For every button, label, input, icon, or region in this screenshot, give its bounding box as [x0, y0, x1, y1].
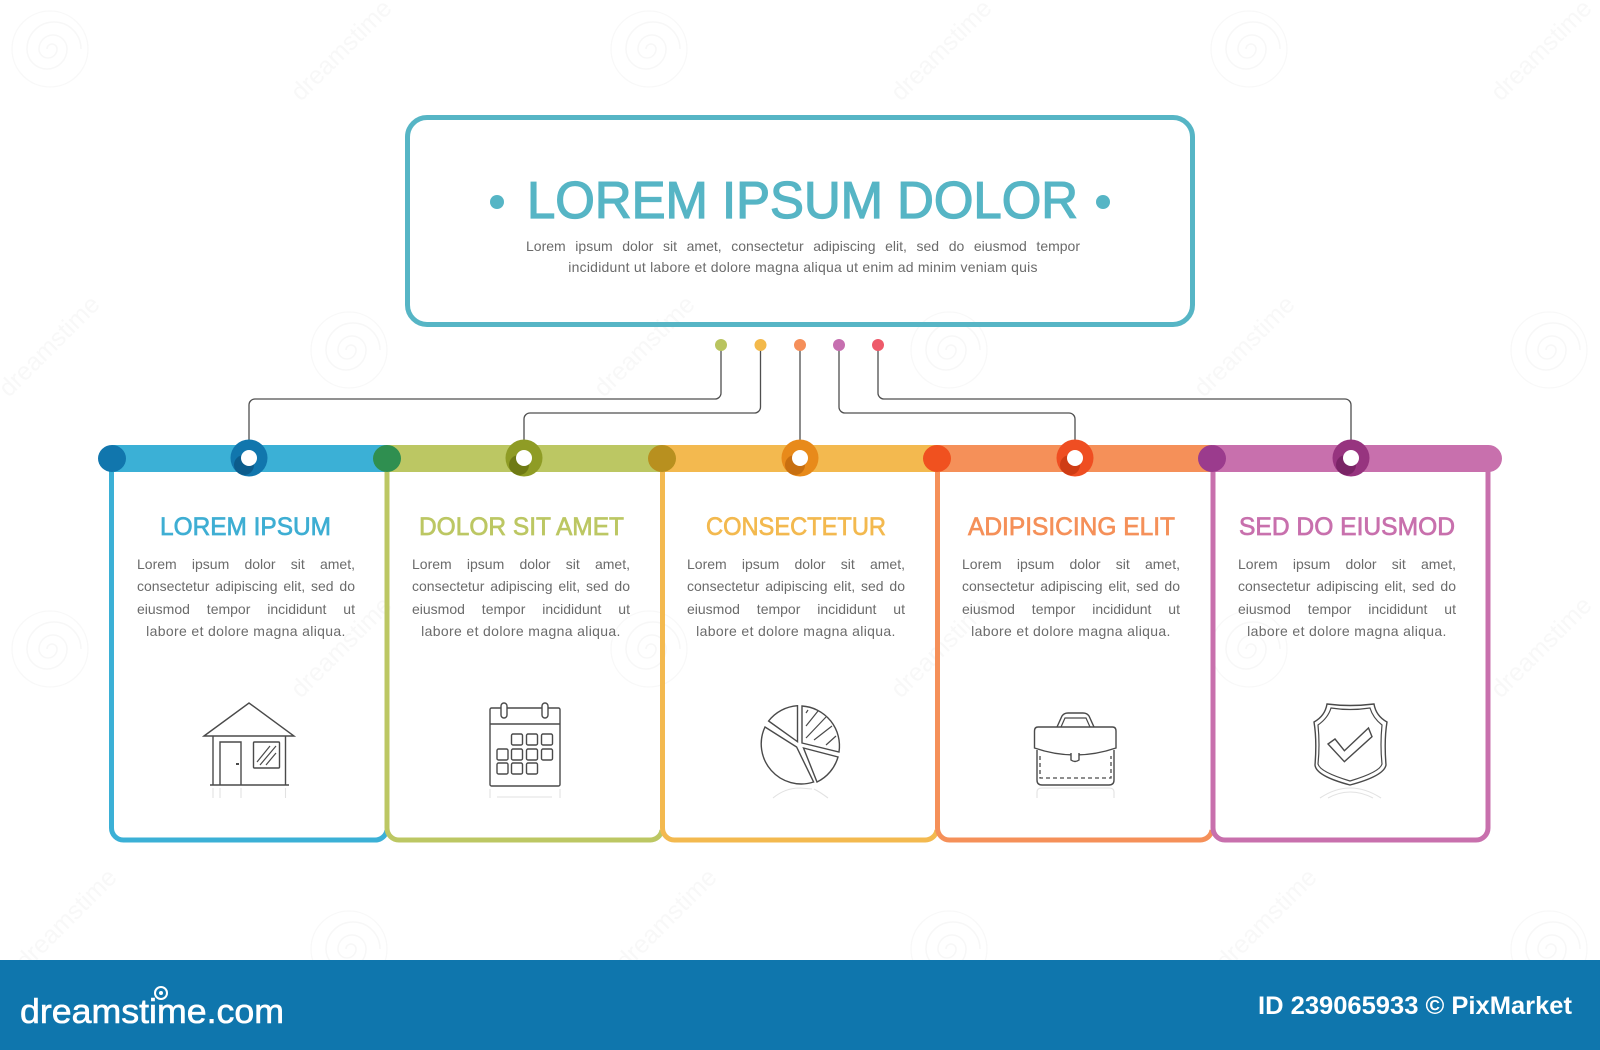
panel: card 4 adipisicing elit [923, 440, 1212, 842]
card 5 frame and bar [1198, 440, 1502, 842]
icon: briefcase [1034, 712, 1117, 798]
icon: calendar [489, 702, 561, 798]
card 1 text: eiusmod tempor incididunt ut [137, 601, 355, 617]
card 2 text: consectetur adipiscing elit, sed do [412, 578, 630, 594]
header description [526, 238, 1080, 275]
card 4 text: consectetur adipiscing elit, sed do [962, 578, 1180, 594]
dreamstime logo: dreamstime.com [20, 993, 284, 1031]
background watermark: dreamstime [1210, 863, 1322, 975]
card 3 text: eiusmod tempor incididunt ut [687, 601, 905, 617]
card 5 text: consectetur adipiscing elit, sed do [1238, 578, 1456, 594]
card 4 title: ADIPISICING ELIT [968, 513, 1175, 541]
card 4 text: labore et dolore magna aliqua. [971, 623, 1171, 639]
card 5 text: eiusmod tempor incididunt ut [1238, 601, 1456, 617]
card 3 text: consectetur adipiscing elit, sed do [687, 578, 905, 594]
icon: house [202, 702, 296, 798]
panel: card 1 lorem ipsum [98, 440, 387, 842]
card 1 text: Lorem ipsum dolor sit amet, [137, 556, 355, 572]
card 1 text: consectetur adipiscing elit, sed do [137, 578, 355, 594]
panel: card 5 sed do eiusmod [1198, 440, 1502, 842]
card 3 text [687, 556, 905, 639]
card 1 text [137, 556, 355, 639]
card 3 text: Lorem ipsum dolor sit amet, [687, 556, 905, 572]
icon: shield with check [1313, 703, 1388, 798]
card 5 text [1238, 556, 1456, 639]
footer bar [0, 960, 1600, 1050]
card 4 text: eiusmod tempor incididunt ut [962, 601, 1180, 617]
panel: card 2 dolor sit amet [373, 440, 662, 842]
card 2 text: Lorem ipsum dolor sit amet, [412, 556, 630, 572]
card 1 frame and bar [98, 440, 387, 842]
background watermark: dreamstime [588, 290, 700, 402]
image id credit: ID 239065933 © PixMarket [1258, 992, 1573, 1020]
heading: lorem ipsum dolor: LOREM IPSUM DOLOR [527, 172, 1078, 230]
card 5 text: Lorem ipsum dolor sit amet, [1238, 556, 1456, 572]
panel: card 3 consectetur [648, 440, 938, 842]
card 4 text: Lorem ipsum dolor sit amet, [962, 556, 1180, 572]
background watermark: dreamstime [10, 863, 122, 975]
card 2 title: DOLOR SIT AMET [419, 513, 624, 541]
card 3 title: CONSECTETUR [706, 513, 886, 541]
card 1 title: LOREM IPSUM [160, 513, 331, 541]
card 2 frame and bar [373, 440, 662, 842]
card 5 text: labore et dolore magna aliqua. [1247, 623, 1447, 639]
card 2 text: labore et dolore magna aliqua. [421, 623, 621, 639]
background watermark: dreamstime [610, 863, 722, 975]
card 2 text [412, 556, 630, 639]
card 3 text: labore et dolore magna aliqua. [696, 623, 896, 639]
panel: header box [405, 115, 1195, 327]
card 4 frame and bar [923, 440, 1212, 842]
card 3 frame and bar [648, 440, 938, 842]
icon: pie chart [760, 705, 840, 798]
background watermark: dreamstime [885, 591, 997, 703]
header outline [405, 115, 1195, 327]
card 5 title: SED DO EIUSMOD [1239, 513, 1455, 541]
header description: incididunt ut labore et dolore magna aliqua ut enim ad minim veniam quis [568, 258, 1038, 274]
header description: Lorem ipsum dolor sit amet, consectetur adipiscing elit, sed do eiusmod tempor [526, 238, 1080, 254]
card 4 text [962, 556, 1180, 639]
card 1 text: labore et dolore magna aliqua. [146, 623, 346, 639]
background watermark: dreamstime [1188, 290, 1300, 402]
card 2 text: eiusmod tempor incididunt ut [412, 601, 630, 617]
background watermark: dreamstime [1485, 591, 1597, 703]
background watermark: dreamstime [285, 591, 397, 703]
